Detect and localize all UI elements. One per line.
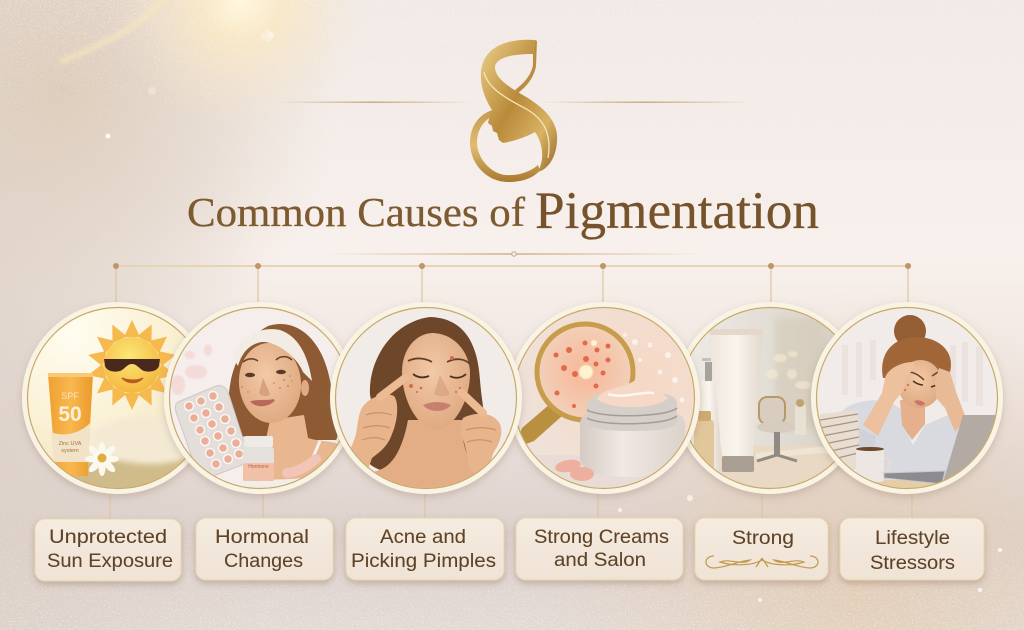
headband [233,329,312,381]
icon: SPF 50 sunscreen tube: 50 [58,403,82,426]
icon: SPF 50 sunscreen tube: SPF [61,391,79,401]
hair and bun [894,315,926,342]
supplement bottle: Hormone [248,464,269,470]
neck and chest [374,420,475,488]
label: lifestyle stressors: Stressors [870,552,955,574]
label: hormonal changes: Changes [224,550,303,572]
right forearm and hand on head [935,368,966,432]
logo [470,40,557,182]
icon: SPF 50 sunscreen tube [48,373,93,476]
white pump bottle [702,358,720,472]
shirt [838,400,968,480]
face [900,360,938,408]
panel: sun exposure illustration [20,302,192,500]
panel: lifestyle stressors illustration [811,302,1003,495]
neck and shoulders [254,415,338,488]
icon: SPF 50 sunscreen tube: Zinc UVA [59,441,82,447]
panel: strong creams and salon product illustration [685,302,841,500]
label: acne and picking pimples: Picking Pimples [351,550,496,572]
label: strong [695,518,828,580]
hair [368,317,486,476]
decorative title lines [277,102,751,256]
label: acne and picking pimples: Acne and [380,526,466,548]
salon stool and mirror [757,397,806,461]
connector tree [110,263,912,519]
label: acne and picking pimples [346,518,504,580]
face [402,333,470,420]
supplement bottle [243,436,274,481]
magnifier with skin spots [518,324,633,444]
title: Pigmentation [535,182,819,240]
neck [900,400,925,440]
hair [229,324,337,440]
icon: SPF 50 sunscreen tube: system [61,448,79,454]
label: strong creams and salon: Strong Creams [534,526,669,548]
pink bracelet [287,459,316,473]
panel: hormonal changes illustration [164,302,356,495]
coffee mug [856,447,890,482]
desk [876,480,944,488]
blister pack [175,385,249,479]
label: hormonal changes [196,518,333,580]
label: lifestyle stressors: Lifestyle [875,527,950,549]
paper stack [820,410,860,470]
laptop [884,415,998,484]
label: strong creams and salon [516,518,683,580]
large cream tube [710,329,763,472]
gold flourish [706,556,818,568]
label: unprotected sun exposure: Unprotected [49,526,167,548]
label: strong: Strong [732,527,794,549]
label: lifestyle stressors [840,518,984,580]
cream jar [580,376,685,477]
title: Common Causes of [187,189,525,235]
right hand pointing to cheek [461,393,501,482]
icon: daisy [85,442,119,476]
panel: strong creams magnifier illustration [508,302,700,495]
title [187,182,819,240]
label: strong creams and salon: and Salon [554,549,646,571]
panel: acne and picking pimples illustration [330,302,522,495]
ear [301,380,309,396]
small amber bottle [694,411,714,474]
pink petals [554,458,594,481]
left hand pointing to cheek [351,375,404,467]
icon: sun with sunglasses [86,320,178,410]
label: unprotected sun exposure: Sun Exposure [47,550,173,572]
label: hormonal changes: Hormonal [215,526,309,548]
face [238,343,302,423]
left forearm and hand on head [863,362,915,436]
left sleeve [858,428,876,448]
label: unprotected sun exposure [35,519,181,581]
